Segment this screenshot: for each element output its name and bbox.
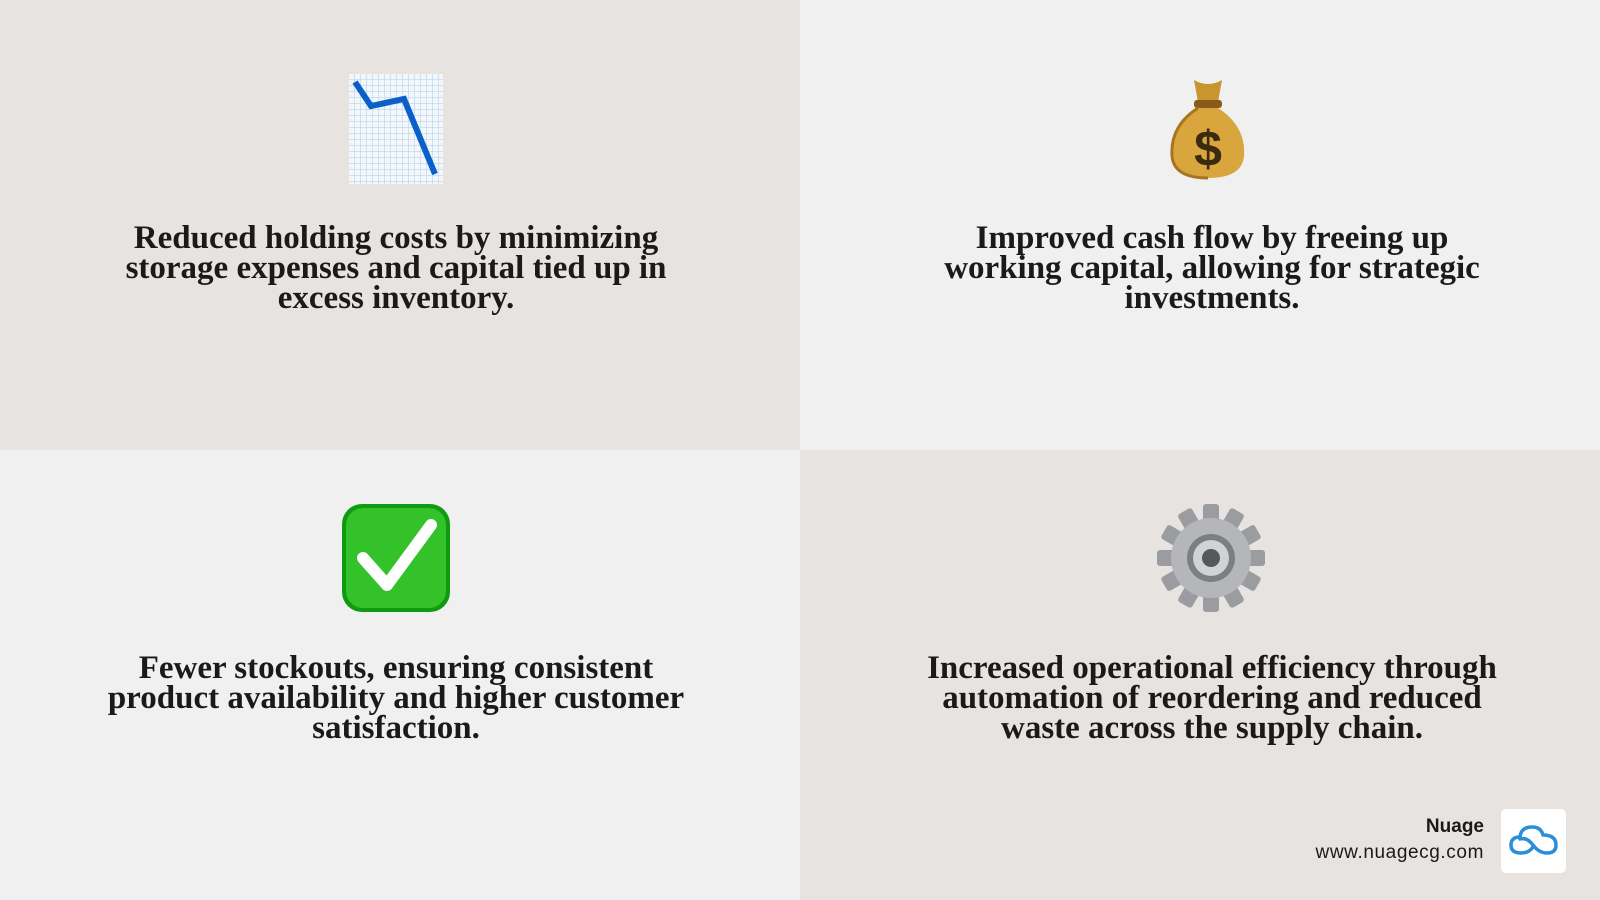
panel: efficiency — [800, 450, 1600, 900]
icon: money bag: $ — [1194, 121, 1222, 177]
text: stockouts: product availability and higher customer — [108, 680, 684, 716]
brand: Nuage: Nuage — [1426, 816, 1484, 837]
text: stockouts — [108, 650, 684, 746]
brand: Nuage — [1316, 816, 1484, 863]
text: efficiency — [927, 650, 1497, 746]
text: holding costs: storage expenses and capital tied up in — [126, 250, 666, 286]
text: stockouts: Fewer stockouts, ensuring consistent — [139, 650, 653, 686]
icon: money bag — [1170, 80, 1244, 180]
icon: logo — [1501, 809, 1566, 873]
text: cash flow: working capital, allowing for strategic — [944, 250, 1480, 286]
text: stockouts: satisfaction. — [312, 710, 480, 746]
brand: Nuage: www.nuagecg.com — [1316, 842, 1484, 863]
text: holding costs — [126, 220, 666, 316]
text: holding costs: excess inventory. — [278, 280, 514, 316]
text: holding costs: Reduced holding costs by minimizing — [134, 220, 658, 256]
icon: gear — [1157, 504, 1265, 612]
text: cash flow: investments. — [1124, 280, 1300, 316]
panel: stockouts — [0, 450, 800, 900]
icon: chart decreasing — [349, 74, 443, 184]
text: efficiency: Increased operational efficiency through — [927, 650, 1497, 686]
panel: holding costs — [0, 0, 800, 450]
icon: check mark — [342, 504, 450, 612]
text: efficiency: automation of reordering and reduced — [942, 680, 1482, 716]
text: efficiency: waste across the supply chain. — [1001, 710, 1423, 746]
panel: cash flow — [800, 0, 1600, 450]
text: cash flow: Improved cash flow by freeing up — [976, 220, 1448, 256]
text: cash flow — [944, 220, 1480, 316]
